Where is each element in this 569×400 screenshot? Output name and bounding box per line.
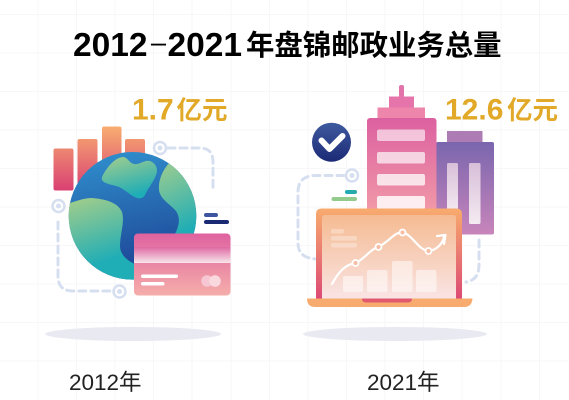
node <box>346 170 358 182</box>
title: 2012 <box>73 27 148 64</box>
credit card <box>134 234 230 296</box>
title: 2021 <box>168 27 242 64</box>
dashed connectors <box>298 176 479 282</box>
title: – <box>150 34 167 54</box>
nodes <box>52 142 166 298</box>
check badge <box>312 123 351 162</box>
illustration: globe and card <box>52 126 230 298</box>
screen bars <box>343 261 436 292</box>
shadow: left <box>45 327 221 341</box>
globe <box>69 152 196 280</box>
label: 2021: 2021年 <box>367 370 440 395</box>
value: 2021: 12.6 <box>445 94 503 126</box>
illustration: city and laptop <box>298 85 494 307</box>
small lines <box>345 190 357 194</box>
value: 2021 <box>445 94 558 126</box>
value: 2012: 1.7 <box>132 94 174 126</box>
pink tower <box>367 85 436 213</box>
purple building <box>436 131 494 234</box>
continents <box>68 157 196 280</box>
line chart <box>332 232 446 284</box>
screen text <box>331 229 357 248</box>
value: 2021: 亿元 <box>507 97 558 125</box>
dashed connectors <box>58 148 213 291</box>
title: 年盘锦邮政业务总量 <box>246 30 502 62</box>
value: 2012 <box>132 94 228 126</box>
label: 2012: 2012年 <box>69 370 142 395</box>
title <box>73 27 502 64</box>
value: 2012: 亿元 <box>176 97 228 125</box>
bar chart <box>54 126 145 199</box>
shadow: right <box>303 327 487 341</box>
laptop <box>307 208 472 307</box>
small lines <box>204 213 218 217</box>
